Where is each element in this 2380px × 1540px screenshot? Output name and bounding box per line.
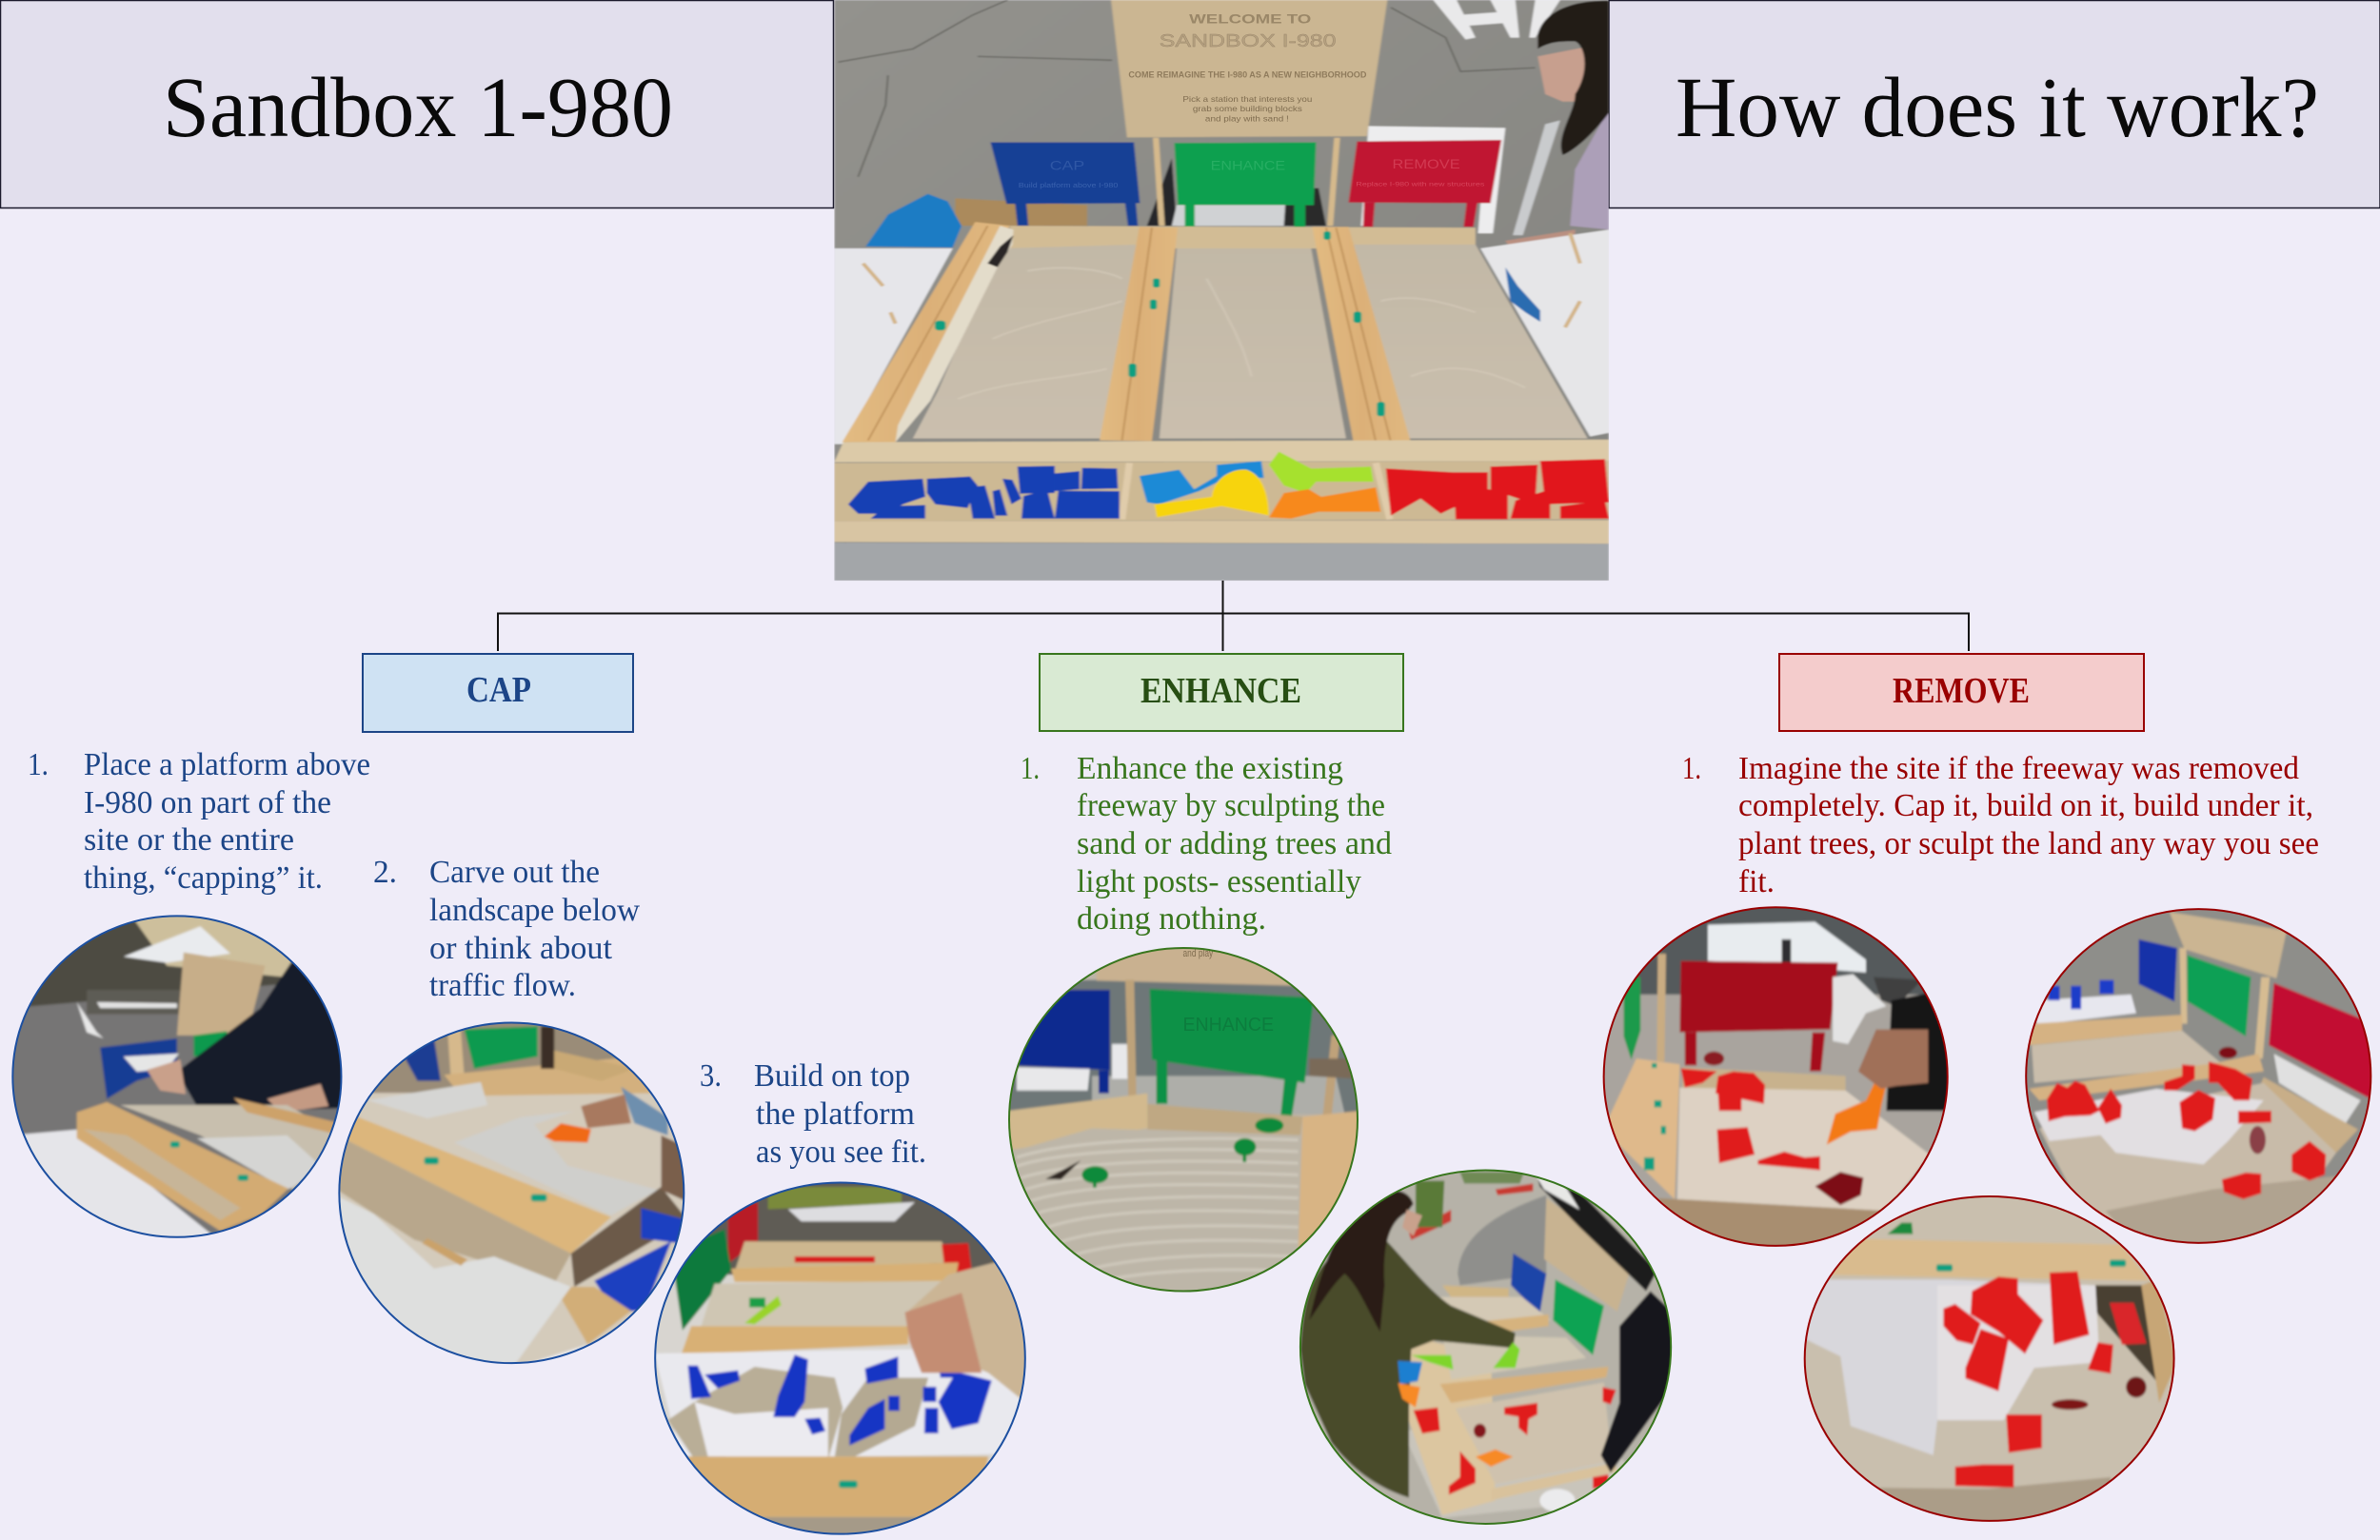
label: REMOVE: REMOVE — [1893, 671, 2030, 711]
photo: sandbox model overview — [834, 0, 1609, 581]
text block: remove step 1: 1. — [1682, 751, 1701, 786]
text block: cap step 1: I-980 on part of the — [84, 785, 331, 820]
text block: cap step 3: 3. — [700, 1058, 722, 1094]
text block: remove step 1: plant trees, or sculpt the land any way you see — [1738, 826, 2319, 861]
photo circle: remove step 3 — [1802, 1194, 2177, 1524]
text block: enhance step 1 — [1021, 751, 1392, 937]
text block: remove step 1: Imagine the site if the freeway was removed — [1738, 751, 2299, 786]
text block: enhance step 1: doing nothing. — [1077, 901, 1266, 937]
panel: left header — [0, 0, 834, 207]
photo circle: enhance step 1 — [1008, 945, 1360, 1294]
text block: cap step 3: as you see fit. — [756, 1135, 926, 1170]
text block: enhance step 1: sand or adding trees and — [1077, 826, 1392, 861]
sign: remove: REMOVE — [1393, 158, 1460, 172]
text block: cap step 1: thing, “capping” it. — [84, 860, 323, 896]
sign: enhance: ENHANCE — [1211, 160, 1285, 173]
label: CAP — [363, 654, 633, 732]
text block: remove step 1: fit. — [1738, 864, 1775, 899]
sign: welcome to Sandbox I-980: grab some building blocks — [1193, 105, 1302, 114]
text block: cap step 2: traffic flow. — [429, 968, 576, 1003]
sign: welcome to Sandbox I-980: WELCOME TO — [1189, 12, 1311, 27]
sign: welcome to Sandbox I-980: and play with sand ! — [1205, 114, 1289, 124]
sign: cap: Build platform above I-980 — [1019, 181, 1119, 189]
label: CAP: CAP — [466, 670, 531, 710]
text block: cap step 2: 2. — [373, 855, 397, 890]
text block: cap step 3: Build on top — [754, 1058, 910, 1094]
text block: remove step 1 — [1682, 751, 2319, 899]
photo circle: cap step 2 — [337, 1020, 688, 1366]
photo circle: remove step 2 — [2024, 907, 2373, 1248]
text block: cap step 1: Place a platform above — [84, 747, 370, 782]
text block: remove step 1: completely. Cap it, build on it, build under it, — [1738, 788, 2313, 823]
photo circle: remove step 1 — [1600, 904, 1950, 1251]
photo circle: cap step 1 — [10, 915, 347, 1241]
heading: how does it work: How does it work? — [1676, 61, 2319, 155]
label: REMOVE — [1779, 654, 2144, 731]
text block: cap step 2: or think about — [429, 931, 613, 966]
photo circle: enhance step 1: ENHANCE — [1183, 1013, 1274, 1035]
title: Sandbox 1-980 — [163, 61, 673, 155]
panel: right header — [1609, 0, 2380, 207]
text block: enhance step 1: light posts- essentially — [1077, 864, 1361, 899]
label: ENHANCE: ENHANCE — [1140, 671, 1301, 711]
text block: cap step 3 — [700, 1058, 926, 1170]
text block: enhance step 1: Enhance the existing — [1077, 751, 1343, 786]
sign: welcome to Sandbox I-980: SANDBOX I-980 — [1160, 31, 1337, 50]
photo circle: enhance step 2 — [1299, 1169, 1675, 1527]
label: ENHANCE — [1040, 654, 1403, 731]
text block: cap step 1 — [28, 747, 370, 896]
text block: cap step 1: site or the entire — [84, 822, 294, 858]
photo circle: cap step 3 — [651, 1181, 1028, 1540]
sign: welcome to Sandbox I-980: COME REIMAGINE THE I-980 AS A NEW NEIGHBORHOOD — [1128, 70, 1366, 80]
text block: enhance step 1: 1. — [1021, 751, 1040, 786]
text block: cap step 1: 1. — [28, 747, 49, 782]
text block: cap step 3: the platform — [756, 1096, 915, 1132]
photo circle: enhance step 1: and play — [1183, 948, 1213, 960]
connector tree — [498, 581, 1969, 651]
sign: welcome to Sandbox I-980 — [1128, 12, 1366, 124]
sign: cap: CAP — [1050, 160, 1084, 173]
text block: cap step 2: Carve out the — [429, 855, 600, 890]
sign: cap — [1019, 160, 1119, 189]
text block: enhance step 1: freeway by sculpting the — [1077, 788, 1385, 823]
sign: welcome to Sandbox I-980: Pick a station that interests you — [1182, 95, 1312, 104]
sign: remove: Replace I-980 with new structures — [1356, 180, 1484, 188]
sign: remove — [1356, 158, 1484, 188]
text block: cap step 2: landscape below — [429, 893, 640, 928]
text block: cap step 2 — [373, 855, 640, 1003]
